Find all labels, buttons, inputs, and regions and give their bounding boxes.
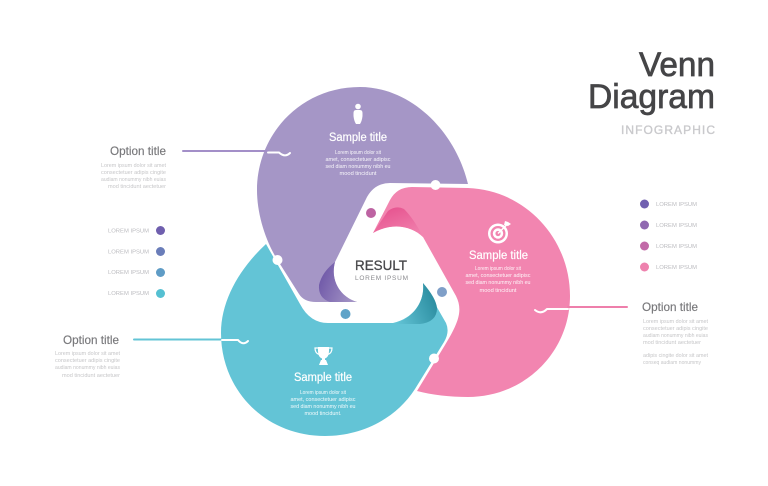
legend: left: LOREM IPSUM — [108, 291, 149, 297]
icon: person — [354, 104, 362, 124]
teal text: sed diam nonummy nibh eu — [290, 404, 356, 410]
legend: left: LOREM IPSUM — [108, 250, 149, 256]
callout line: teal — [134, 340, 248, 343]
pink text: Lorem ipsum dolor sit — [475, 266, 522, 272]
option block: purple: Lorem ipsum dolor sit amet — [101, 163, 167, 169]
title — [588, 46, 715, 116]
legend: right: LOREM IPSUM — [656, 202, 697, 208]
pink title: Sample title — [469, 250, 528, 262]
teal text: mood tincidunt. — [304, 411, 342, 417]
purple text: Lorem ipsum dolor sit — [335, 150, 382, 156]
legend: right: LOREM IPSUM — [656, 265, 697, 271]
white connector nodes — [272, 180, 440, 364]
pink shape — [373, 187, 570, 397]
option block: pink: adipis cingite dolor sit amet — [643, 353, 709, 359]
overlap dots — [340, 208, 447, 319]
center result — [355, 257, 408, 282]
purple text: sed diam nonummy nibh eu — [326, 164, 391, 170]
option block: teal: consectetuer adipis cingite — [55, 358, 120, 364]
teal text: amet, consectetuer adipisc — [290, 397, 356, 403]
option block: teal: audiam nonummy nibh euias — [55, 365, 120, 371]
panel: purple circle — [257, 87, 468, 302]
purple title: Sample title — [329, 132, 387, 144]
pink text — [466, 266, 531, 294]
option block: teal: Option title — [63, 333, 119, 347]
legend: right: LOREM IPSUM — [656, 244, 697, 250]
pink fold — [373, 207, 423, 237]
option block: purple: audiam nonummy nibh euias — [101, 177, 166, 183]
option block: teal: Lorem ipsum dolor sit amet — [55, 351, 121, 357]
subtitle: INFOGRAPHIC — [621, 123, 715, 137]
teal text: Lorem ipsum dolor sit — [300, 390, 347, 396]
pink text: amet, consectetuer adipisc — [466, 273, 531, 279]
purple fold — [319, 262, 357, 302]
panel: teal circle — [221, 244, 448, 436]
panel: pink circle — [373, 187, 570, 397]
option block: pink — [642, 300, 709, 366]
teal fold — [393, 283, 437, 324]
option block: purple — [101, 144, 167, 190]
purple text — [326, 150, 391, 177]
option block: purple: mod tincidunt aectetuer — [108, 184, 166, 190]
purple text: amet, consectetuer adipisc — [326, 157, 391, 163]
callout line: pink — [535, 307, 627, 312]
legend: right: LOREM IPSUM — [656, 223, 697, 229]
option block: pink: Lorem ipsum dolor sit amet — [643, 319, 709, 325]
option block: pink: consectetuer adipis cingite — [643, 326, 708, 332]
purple text: mood tincidunt — [340, 171, 377, 177]
option block: teal — [55, 333, 121, 379]
icon: trophy — [315, 347, 332, 365]
teal shape — [221, 244, 448, 436]
option block: pink: conseq audiam nonummy — [643, 360, 701, 366]
title: Diagram — [588, 78, 715, 116]
teal title: Sample title — [294, 372, 352, 384]
center result: RESULT — [355, 257, 407, 273]
callout line: purple — [183, 151, 290, 155]
option block: teal: mod tincidunt aectetuer — [62, 373, 120, 379]
legend: left — [108, 226, 165, 298]
title: Venn — [639, 46, 715, 84]
teal text — [290, 390, 356, 417]
option block: pink: audiam nonummy nibh euias — [643, 333, 708, 339]
legend: right — [640, 200, 697, 272]
center result: LOREM IPSUM — [355, 275, 408, 282]
pink text: sed diam nonummy nibh eu — [466, 280, 531, 286]
legend: left: LOREM IPSUM — [108, 228, 149, 234]
legend: left: LOREM IPSUM — [108, 270, 149, 276]
option block: purple: Option title — [110, 144, 166, 158]
icon: target — [488, 221, 511, 244]
option block: pink: mod tincidunt aectetuer — [643, 340, 701, 346]
purple shape — [257, 87, 468, 302]
pink text: mood tincidunt — [480, 288, 517, 294]
option block: pink: Option title — [642, 300, 698, 314]
option block: purple: consectetuer adipis cingite — [101, 170, 166, 176]
